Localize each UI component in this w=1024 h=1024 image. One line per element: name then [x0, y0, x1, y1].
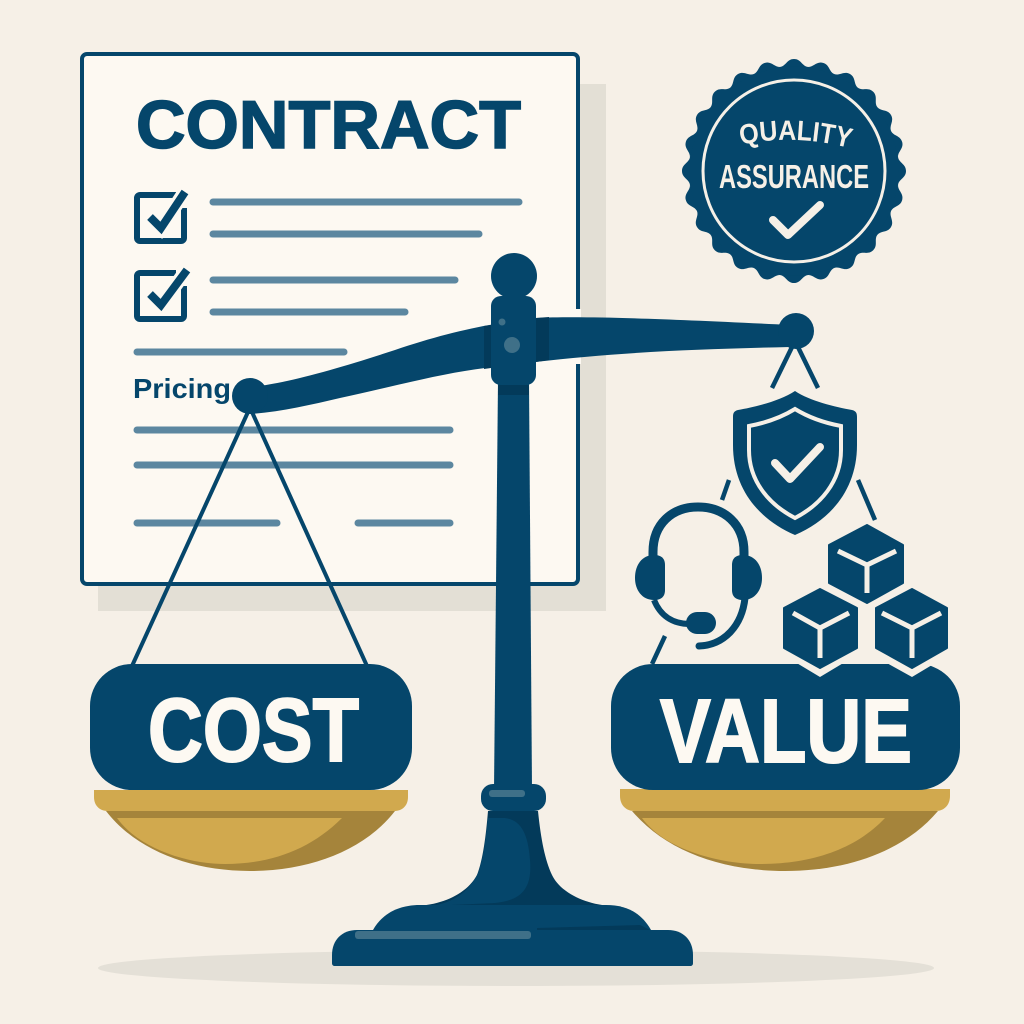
text lines: contract clauses: [137, 202, 519, 523]
document border gap: [573, 309, 581, 364]
ground shadow: [98, 950, 934, 986]
scale beam: [250, 317, 790, 414]
label: pricing: Pricing: [133, 373, 231, 404]
icon: quality assurance badge: [682, 59, 906, 283]
heading: contract: CONTRACT: [136, 87, 521, 163]
icon: shield: [733, 391, 857, 535]
icon: cubes: [784, 525, 947, 668]
panel: value pan: [611, 662, 960, 871]
cube top: [829, 525, 903, 603]
scale post: [494, 380, 532, 790]
label: cost: COST: [148, 681, 359, 781]
icon: badge check: [773, 205, 820, 235]
icon: headset: [635, 507, 762, 646]
cube left: [784, 589, 857, 668]
bowl: cost: [94, 790, 408, 871]
panel: contract document: [82, 54, 606, 611]
right hanging strings: [652, 345, 875, 664]
left hanging strings: [132, 412, 367, 666]
bowl: value: [620, 789, 950, 871]
icon: checkbox one: [137, 192, 185, 241]
icon: checkbox two: [137, 270, 187, 319]
panel: balance scale: [232, 253, 814, 966]
badge text: quality: QUALITY: [740, 120, 854, 148]
scale base: [332, 784, 693, 966]
label: value: VALUE: [660, 682, 912, 782]
beam collar: [491, 296, 536, 385]
right beam end: [778, 313, 814, 349]
left beam end: [232, 378, 268, 414]
panel: cost pan: [90, 664, 412, 871]
label box: value: [611, 664, 960, 790]
label box: cost: [90, 664, 412, 790]
badge text: assurance: ASSURANCE: [719, 158, 869, 195]
top finial: [491, 253, 537, 299]
cube right: [876, 589, 947, 668]
